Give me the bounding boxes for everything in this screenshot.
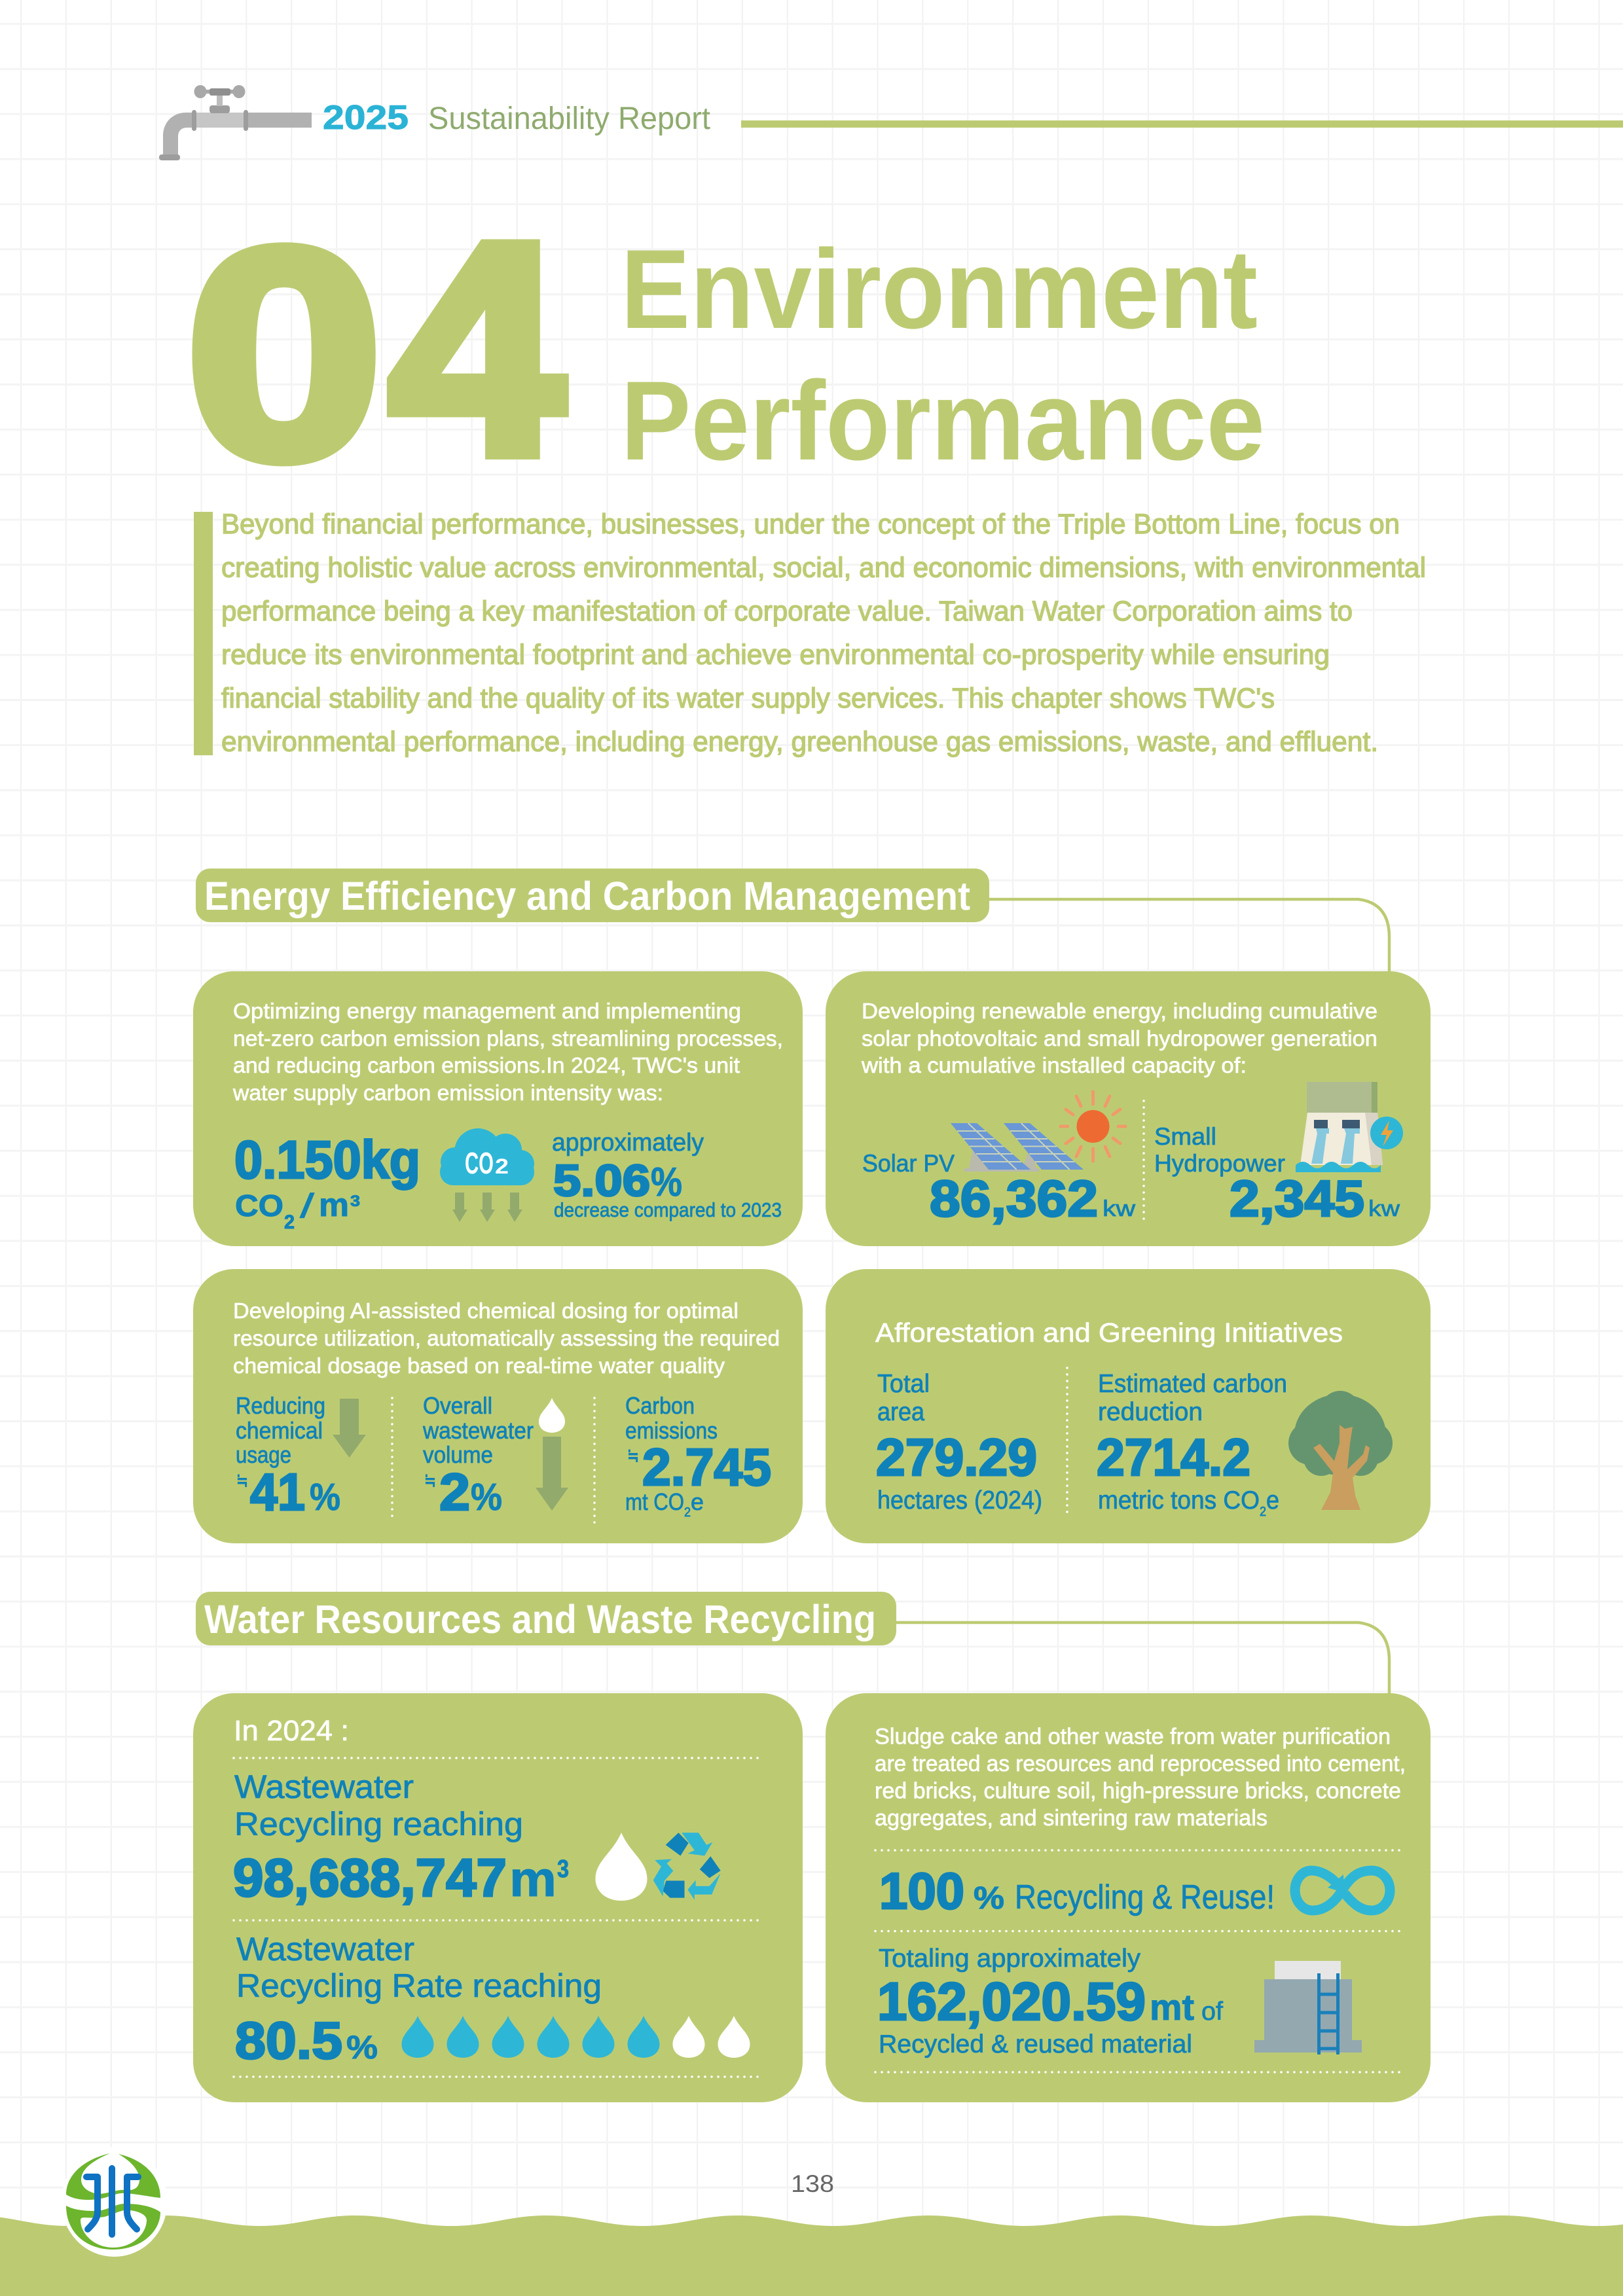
stat: carbon emissions: 2 <box>684 1505 691 1520</box>
stat: carbon reduction: reduction <box>1098 1398 1203 1426</box>
panel text: Optimizing energy management and implementing <box>233 999 741 1023</box>
panel: waste recycling <box>826 1693 1431 2102</box>
stat: carbon intensity: m <box>319 1187 349 1223</box>
panel: afforestation <box>826 1269 1431 1543</box>
stat: chemical usage: 41 <box>250 1463 305 1521</box>
stat: wastewater volume: 2 <box>439 1463 470 1521</box>
panel: AI-assisted chemical dosing <box>193 1269 803 1543</box>
stat: recycled volume: Wastewater <box>234 1768 414 1805</box>
panel text: red bricks, culture soil, high-pressure bricks, concrete <box>875 1779 1401 1804</box>
icon: hydropower dam <box>1296 1082 1403 1172</box>
intro paragraph: Beyond financial performance, businesses, under the concept of the Triple Bottom Line, focus on <box>221 509 1400 540</box>
stat: wastewater volume: ≒ <box>424 1470 436 1492</box>
stat: solar PV capacity: Solar PV <box>862 1150 955 1177</box>
section heading: energy <box>196 869 1389 975</box>
stat: chemical usage: ≒ <box>236 1470 248 1492</box>
stat: total area: area <box>877 1398 924 1426</box>
stat: wastewater volume: volume <box>423 1441 493 1468</box>
stat: decrease percentage: % <box>651 1160 682 1205</box>
icon: solar panels and sun <box>951 1092 1125 1172</box>
stat: chemical usage: usage <box>236 1441 291 1468</box>
panel text <box>233 1299 780 1378</box>
icon: tree <box>1288 1391 1393 1510</box>
stat: 100% recycling: 100 <box>879 1862 964 1920</box>
stat: carbon intensity <box>234 1130 420 1233</box>
panel text <box>861 999 1377 1077</box>
stat: decrease percentage: approximately <box>552 1129 704 1157</box>
stat: chemical usage: Reducing <box>236 1392 325 1419</box>
section heading: water <box>196 1592 1389 1697</box>
stat: recycled material total: Totaling approximately <box>879 1945 1141 1973</box>
panel text: Sludge cake and other waste from water purification <box>875 1724 1391 1749</box>
panel: renewable energy <box>826 971 1431 1246</box>
icon: row of water drops <box>402 2016 750 2058</box>
stat: wastewater volume: wastewater <box>422 1417 534 1444</box>
stat: decrease percentage: decrease compared to 2023 <box>554 1198 782 1221</box>
company logo <box>62 2147 168 2257</box>
stat: solar PV capacity: 86,362 <box>930 1170 1098 1227</box>
stat: recycled material total: Recycled & reused material <box>879 2030 1192 2058</box>
panel text <box>875 1724 1406 1831</box>
stat: 100% recycling <box>879 1862 1275 1920</box>
panel: wastewater recycling <box>193 1693 803 2102</box>
stat: small hydropower capacity: kw <box>1368 1196 1400 1221</box>
stat: recycling rate: Recycling Rate reaching <box>236 1967 602 2004</box>
stat: recycling rate: % <box>346 2029 378 2066</box>
stat: recycled material total <box>877 1945 1223 2058</box>
panel: carbon intensity <box>193 971 803 1246</box>
stat: carbon reduction <box>1097 1370 1287 1519</box>
stat: carbon reduction: Estimated carbon <box>1098 1370 1287 1398</box>
stat: carbon emissions: ≒ <box>627 1445 639 1467</box>
stat: chemical usage <box>236 1392 340 1521</box>
stat: carbon intensity: 2 <box>284 1211 295 1233</box>
icon: white drop <box>596 1833 647 1901</box>
panel text: resource utilization, automatically assessing the required <box>233 1326 780 1350</box>
stat: 100% recycling: Recycling & Reuse! <box>1015 1878 1275 1916</box>
stat: recycled volume <box>233 1768 569 1908</box>
stat: recycled material total: mt <box>1150 1986 1194 2028</box>
stat: chemical usage: chemical <box>236 1417 323 1444</box>
panel text: Developing renewable energy, including cumulative <box>862 999 1377 1023</box>
stat: carbon intensity: CO <box>235 1189 283 1223</box>
report name: Sustainability Report <box>428 101 710 136</box>
stat: carbon emissions <box>625 1392 771 1520</box>
intro paragraph: creating holistic value across environmental, social, and economic dimensions, with environmental <box>221 552 1426 584</box>
section heading: water: Water Resources and Waste Recycling <box>204 1597 876 1641</box>
panel text: water supply carbon emission intensity was: <box>232 1081 663 1105</box>
stat: recycling rate: Wastewater <box>236 1931 414 1967</box>
year label: In 2024 : <box>234 1715 349 1747</box>
stat: 100% recycling: % <box>974 1881 1004 1916</box>
stat: small hydropower capacity: Hydropower <box>1154 1150 1285 1177</box>
intro paragraph: performance being a key manifestation of corporate value. Taiwan Water Corporation aims to <box>221 596 1353 627</box>
stat: carbon emissions: emissions <box>625 1417 718 1444</box>
stat: recycled material total: 162,020.59 <box>877 1972 1146 2032</box>
stat: carbon reduction: 2 <box>1260 1505 1266 1519</box>
stat: small hydropower capacity: 2,345 <box>1230 1170 1364 1227</box>
stat: solar PV capacity: kw <box>1103 1196 1136 1221</box>
stat: total area: hectares (2024) <box>877 1486 1042 1515</box>
chapter title <box>621 226 1265 484</box>
panel heading: Afforestation and Greening Initiatives <box>875 1318 1343 1348</box>
report year: 2025 <box>323 99 409 137</box>
icon: infinity loop <box>1295 1871 1390 1910</box>
stat: chemical usage: % <box>310 1476 340 1518</box>
panel text: net-zero carbon emission plans, streamlining processes, <box>233 1026 783 1050</box>
panel text: chemical dosage based on real-time water quality <box>233 1354 725 1378</box>
panel text: with a cumulative installed capacity of: <box>861 1053 1247 1077</box>
stat: recycled material total: of <box>1201 1998 1223 2026</box>
stat: decrease percentage: 5.06 <box>553 1156 650 1206</box>
icon: water faucet <box>159 85 312 160</box>
stat: solar PV capacity <box>862 1150 1136 1227</box>
icon: recycle arrows <box>653 1833 721 1900</box>
icon: down arrow <box>333 1399 366 1458</box>
icon: storage tank with ladder <box>1254 1961 1362 2054</box>
stat: recycled volume: 3 <box>557 1856 569 1883</box>
chapter title: Environment <box>621 226 1258 352</box>
panel text: solar photovoltaic and small hydropower generation <box>862 1026 1377 1050</box>
header <box>159 85 1623 160</box>
stat: recycling rate <box>235 1931 602 2070</box>
panel text <box>232 999 783 1105</box>
chapter number: 0 <box>186 188 382 520</box>
intro paragraph: financial stability and the quality of its water supply services. This chapter shows TWC's <box>221 683 1275 714</box>
chapter number: 4 <box>389 181 566 517</box>
intro paragraph <box>194 509 1426 758</box>
intro paragraph: environmental performance, including energy, greenhouse gas emissions, waste, and effluent. <box>221 726 1378 758</box>
icon: white drop and down arrow <box>536 1398 568 1511</box>
stat: carbon emissions: 2.745 <box>642 1438 771 1496</box>
header rule <box>741 120 1623 128</box>
stat: wastewater volume: % <box>471 1476 502 1518</box>
stat: carbon reduction: e <box>1266 1486 1279 1515</box>
stat: recycled volume: Recycling reaching <box>234 1806 523 1842</box>
stat: total area: 279.29 <box>876 1428 1037 1486</box>
chapter number <box>186 181 566 520</box>
stat: small hydropower capacity: Small <box>1154 1123 1216 1150</box>
stat: carbon emissions: mt CO <box>625 1488 684 1515</box>
stat: recycling rate: 80.5 <box>235 2011 342 2070</box>
panel text: are treated as resources and reprocessed into cement, <box>875 1751 1406 1776</box>
chapter title: Performance <box>621 358 1265 484</box>
section heading: energy: Energy Efficiency and Carbon Management <box>204 874 970 918</box>
footer wave <box>0 2215 1623 2296</box>
stat: carbon intensity: 0.150kg <box>234 1130 420 1190</box>
stat: carbon emissions: Carbon <box>625 1392 695 1419</box>
icon: CO2 cloud with down arrows: 2 <box>495 1155 509 1178</box>
page number: 138 <box>791 2170 834 2197</box>
stat: small hydropower capacity <box>1154 1123 1400 1227</box>
stat: carbon reduction: metric tons CO <box>1098 1486 1260 1515</box>
intro paragraph: reduce its environmental footprint and achieve environmental co-prosperity while ensuring <box>221 639 1330 670</box>
stat: carbon intensity: 3 <box>350 1193 360 1210</box>
icon: CO2 cloud with down arrows <box>440 1128 534 1222</box>
stat: recycled volume: m <box>509 1852 556 1907</box>
stat: carbon intensity: / <box>300 1187 315 1225</box>
stat: carbon emissions: e <box>691 1488 704 1515</box>
panel text: and reducing carbon emissions.In 2024, TWC's unit <box>233 1053 740 1077</box>
stat: wastewater volume: Overall <box>423 1392 492 1419</box>
stat: total area: Total <box>877 1370 930 1398</box>
stat: wastewater volume <box>422 1392 534 1521</box>
panel text: aggregates, and sintering raw materials <box>875 1806 1267 1831</box>
panel text: Developing AI-assisted chemical dosing for optimal <box>233 1299 739 1323</box>
stat: recycled volume: 98,688,747 <box>233 1848 507 1908</box>
stat: total area <box>876 1370 1042 1515</box>
stat: decrease percentage <box>552 1129 782 1221</box>
icon: CO2 cloud with down arrows: CO <box>465 1146 494 1180</box>
stat: carbon reduction: 2714.2 <box>1097 1428 1250 1486</box>
